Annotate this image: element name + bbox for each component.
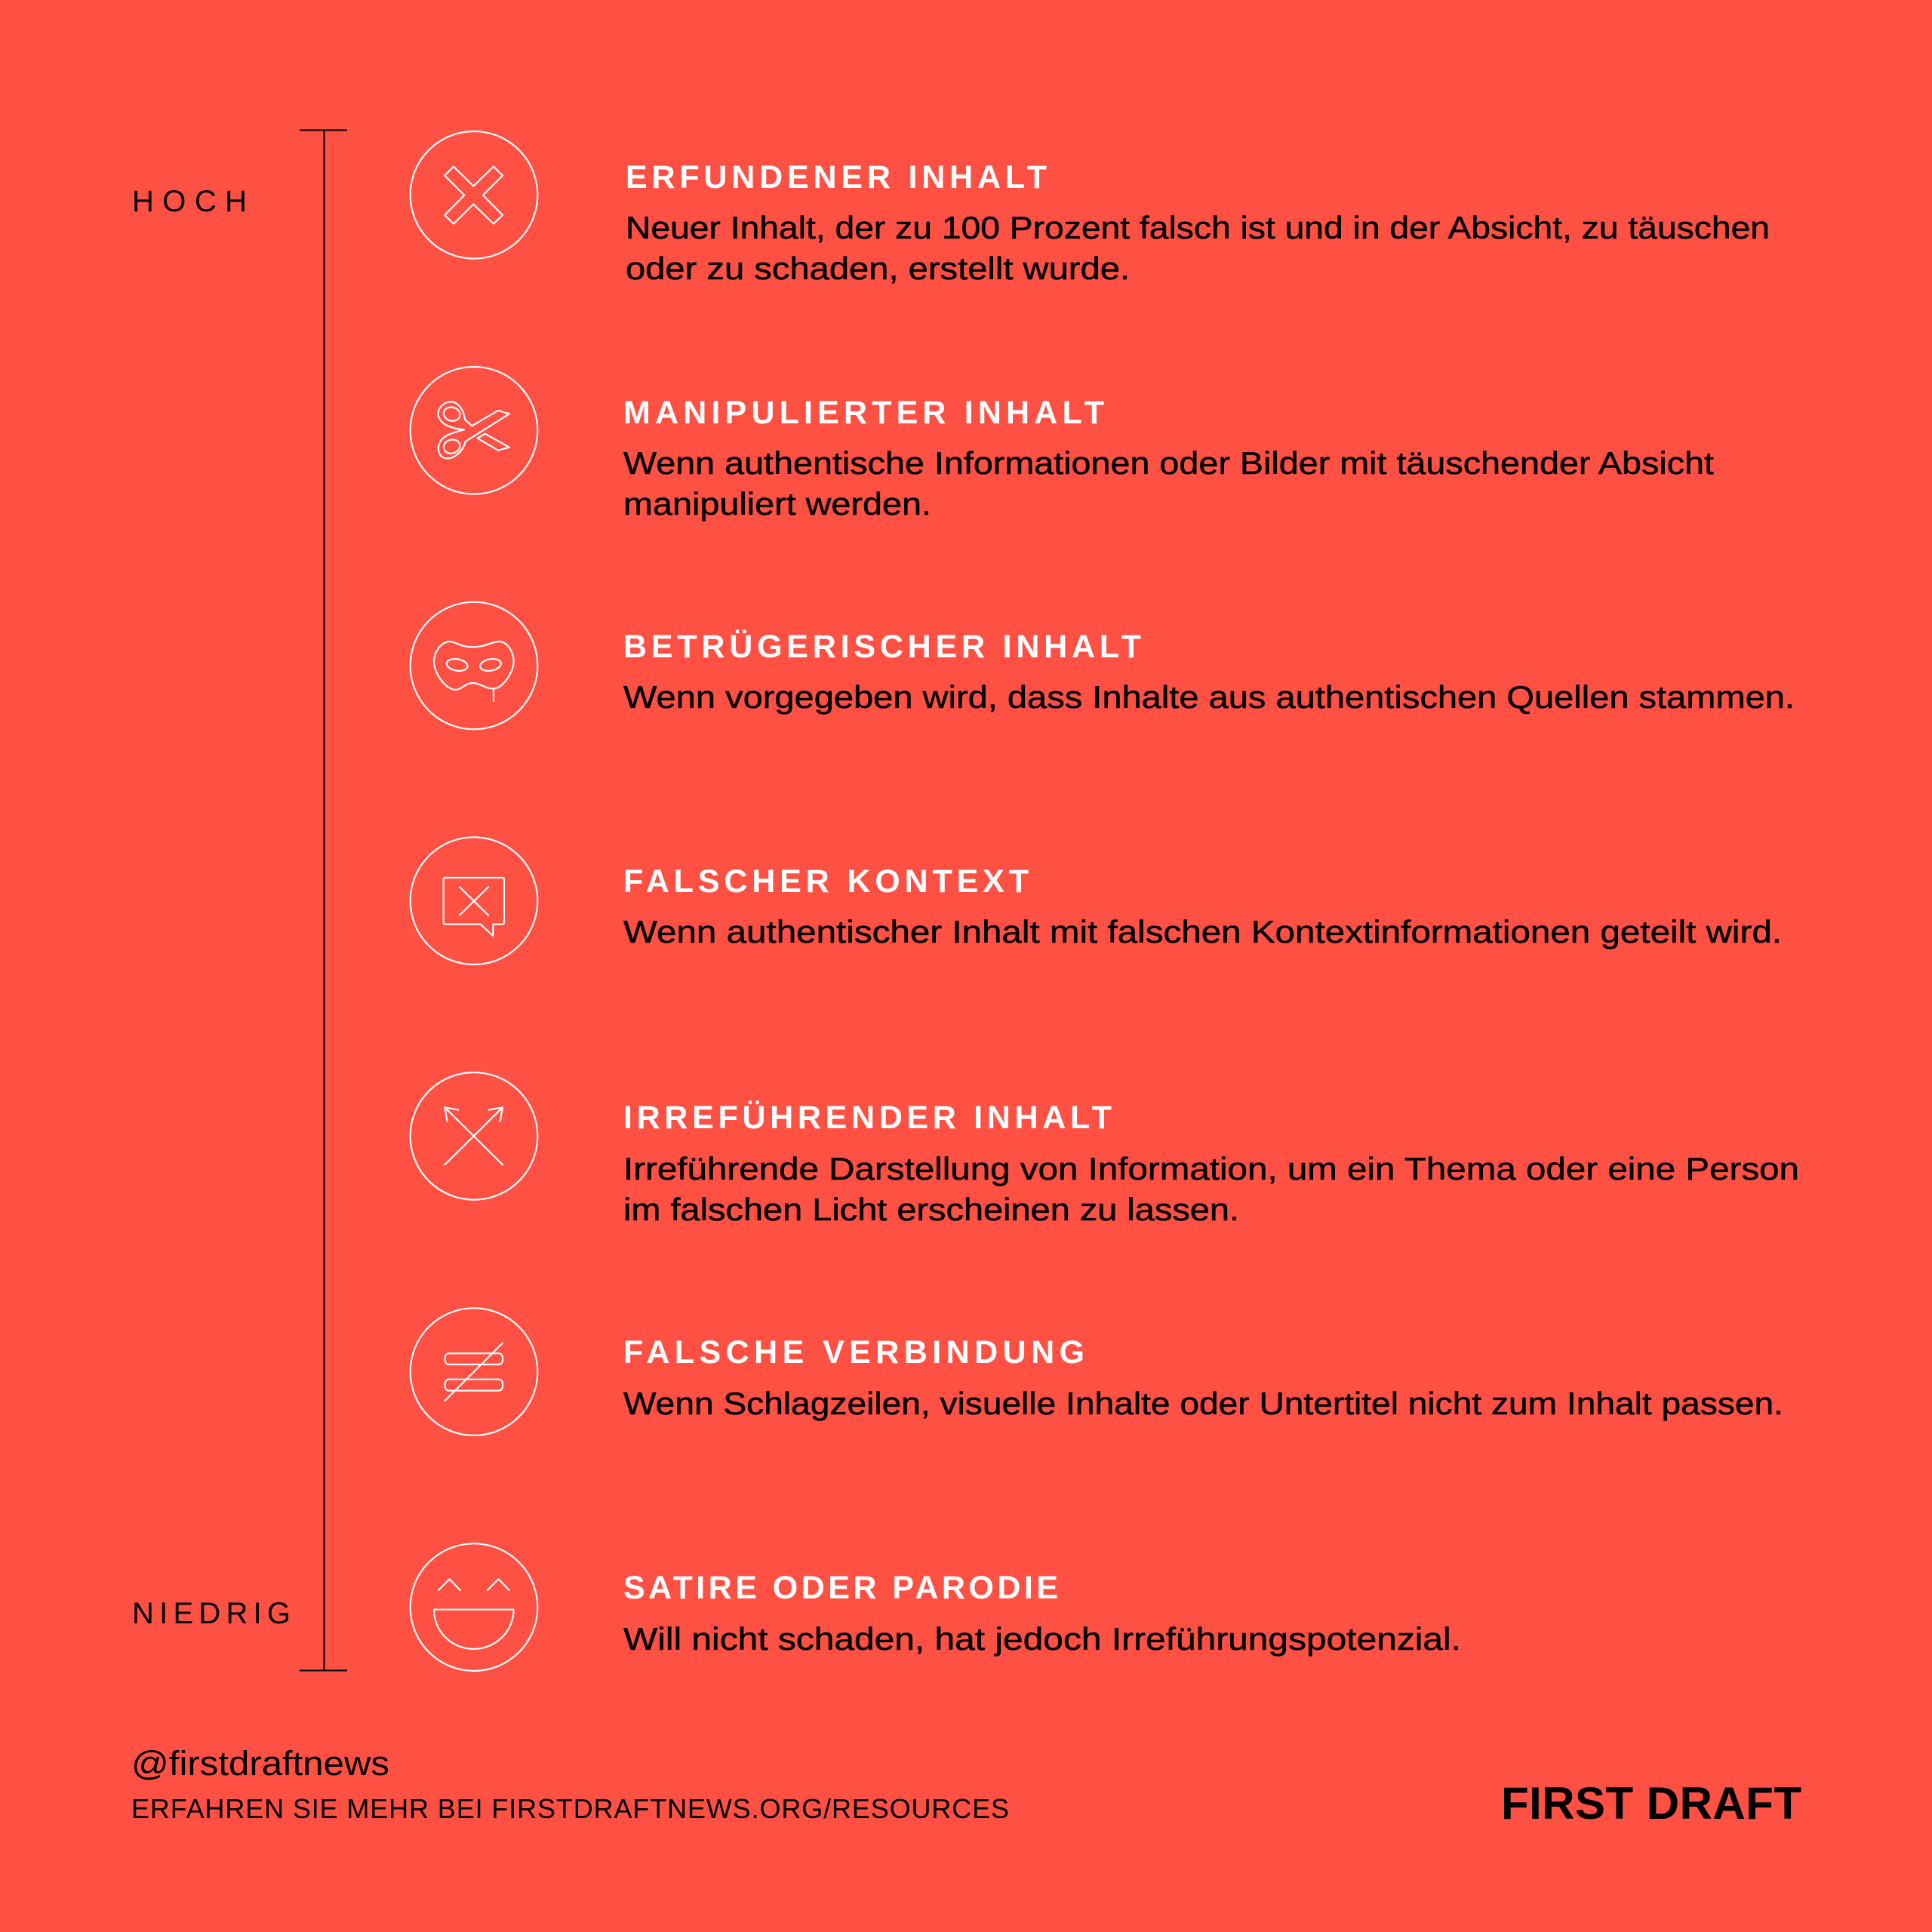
logo: First Draft: FIRST DRAFT <box>1501 1778 1801 1829</box>
panel: Falscher Kontext <box>411 837 1782 964</box>
heading: SATIRE ODER PARODIE <box>623 1570 1058 1606</box>
heading: IRREFÜHRENDER INHALT <box>623 1100 1112 1136</box>
description: Irreführende Darstellung von Information, um ein Thema oder eine Person <box>623 1151 1799 1186</box>
icon: laughing face in circle <box>411 1543 537 1671</box>
heading: MANIPULIERTER INHALT <box>623 395 1104 431</box>
footer: social handle: @firstdraftnews <box>131 1744 389 1783</box>
heading: BETRÜGERISCHER INHALT <box>623 629 1141 665</box>
icon: not-equal sign in circle <box>411 1308 537 1435</box>
description: Neuer Inhalt, der zu 100 Prozent falsch ist und in der Absicht, zu täuschen <box>626 210 1770 245</box>
panel: Falsche Verbindung <box>411 1308 1783 1435</box>
icon: scissors in circle <box>411 367 537 494</box>
label: NIEDRIG: NIEDRIG <box>132 1597 291 1630</box>
footer: resources link: ERFAHREN SIE MEHR BEI FIRSTDRAFTNEWS.ORG/RESOURCES <box>131 1793 1009 1824</box>
description: Wenn authentische Informationen oder Bilder mit täuschender Absicht <box>623 445 1714 481</box>
label: HOCH: HOCH <box>132 185 247 218</box>
description line 2: im falschen Licht erscheinen zu lassen. <box>623 1192 1239 1227</box>
description: Will nicht schaden, hat jedoch Irreführungspotenzial. <box>623 1621 1461 1657</box>
icon: crossing arrows in circle <box>411 1072 537 1200</box>
description: Wenn vorgegeben wird, dass Inhalte aus authentischen Quellen stammen. <box>623 679 1795 715</box>
panel: Erfundener Inhalt <box>411 131 1770 286</box>
icon: mask in circle <box>411 602 537 729</box>
description line 2: oder zu schaden, erstellt wurde. <box>626 251 1130 286</box>
heading: FALSCHER KONTEXT <box>623 863 1029 900</box>
icon: speech bubble with cross in circle <box>411 837 537 964</box>
panel: Manipulierter Inhalt <box>411 367 1714 521</box>
description: Wenn Schlagzeilen, visuelle Inhalte oder Untertitel nicht zum Inhalt passen. <box>623 1386 1783 1421</box>
panel: Betrügerischer Inhalt <box>411 602 1795 729</box>
panel: Irreführender Inhalt <box>411 1072 1799 1227</box>
description line 2: manipuliert werden. <box>623 486 931 521</box>
scale: vertical severity axis <box>300 130 347 1671</box>
panel: Satire oder Parodie <box>411 1543 1461 1671</box>
icon: cross in circle <box>411 131 537 259</box>
heading: FALSCHE VERBINDUNG <box>623 1334 1084 1371</box>
description: Wenn authentischer Inhalt mit falschen Kontextinformationen geteilt wird. <box>623 914 1782 949</box>
heading: ERFUNDENER INHALT <box>626 159 1047 195</box>
